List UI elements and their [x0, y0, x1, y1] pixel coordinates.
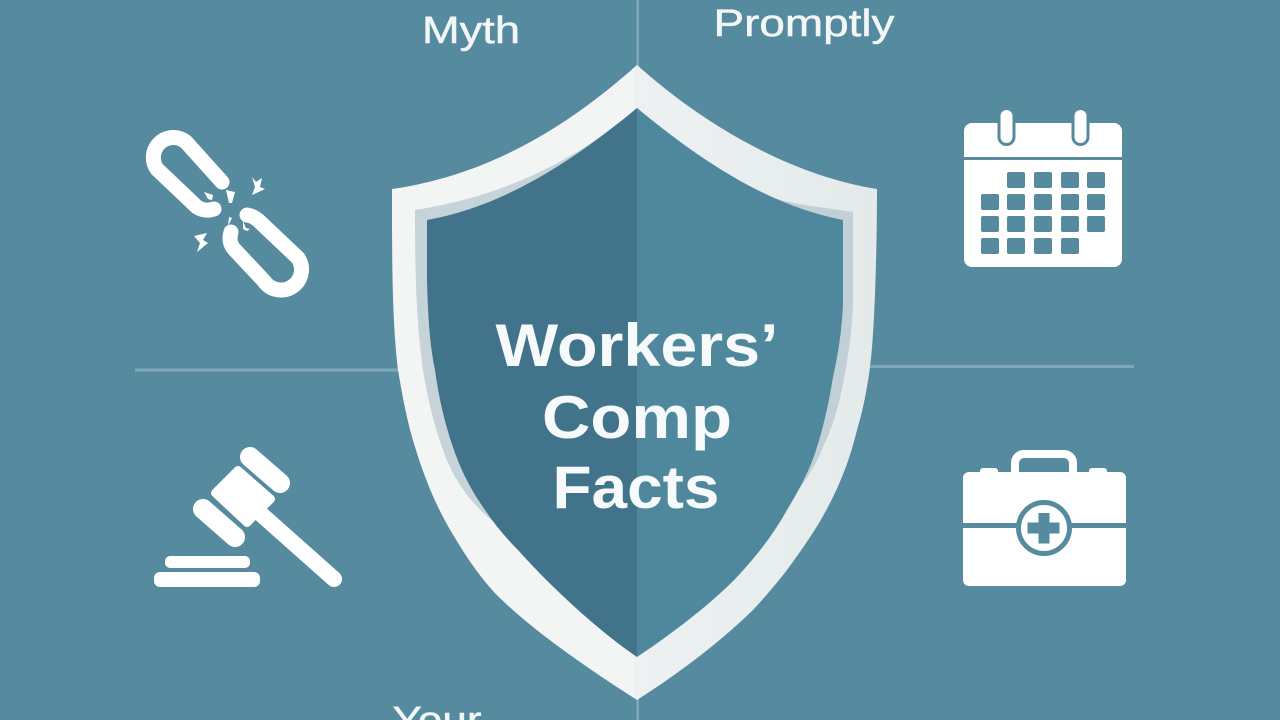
icon: broken chain link: [153, 138, 302, 290]
icon: first aid kit: [963, 454, 1126, 586]
shield: right inner bevel: [700, 198, 853, 488]
label: Myth: Myth: [422, 10, 520, 52]
label: Promptly: Promptly: [714, 3, 894, 45]
icon: gavel: [154, 457, 334, 587]
shield title: Facts: [552, 454, 720, 521]
shield: left inner bevel: [415, 137, 600, 523]
shield: left dark face: [427, 108, 637, 657]
shield title: Comp: [542, 384, 732, 451]
icon: calendar: [964, 108, 1122, 267]
shield title: Workers’: [496, 312, 778, 379]
shield: [392, 65, 877, 700]
shield: right light face: [637, 108, 843, 657]
shield: outer rim: [392, 65, 877, 700]
shield title: [496, 312, 778, 521]
